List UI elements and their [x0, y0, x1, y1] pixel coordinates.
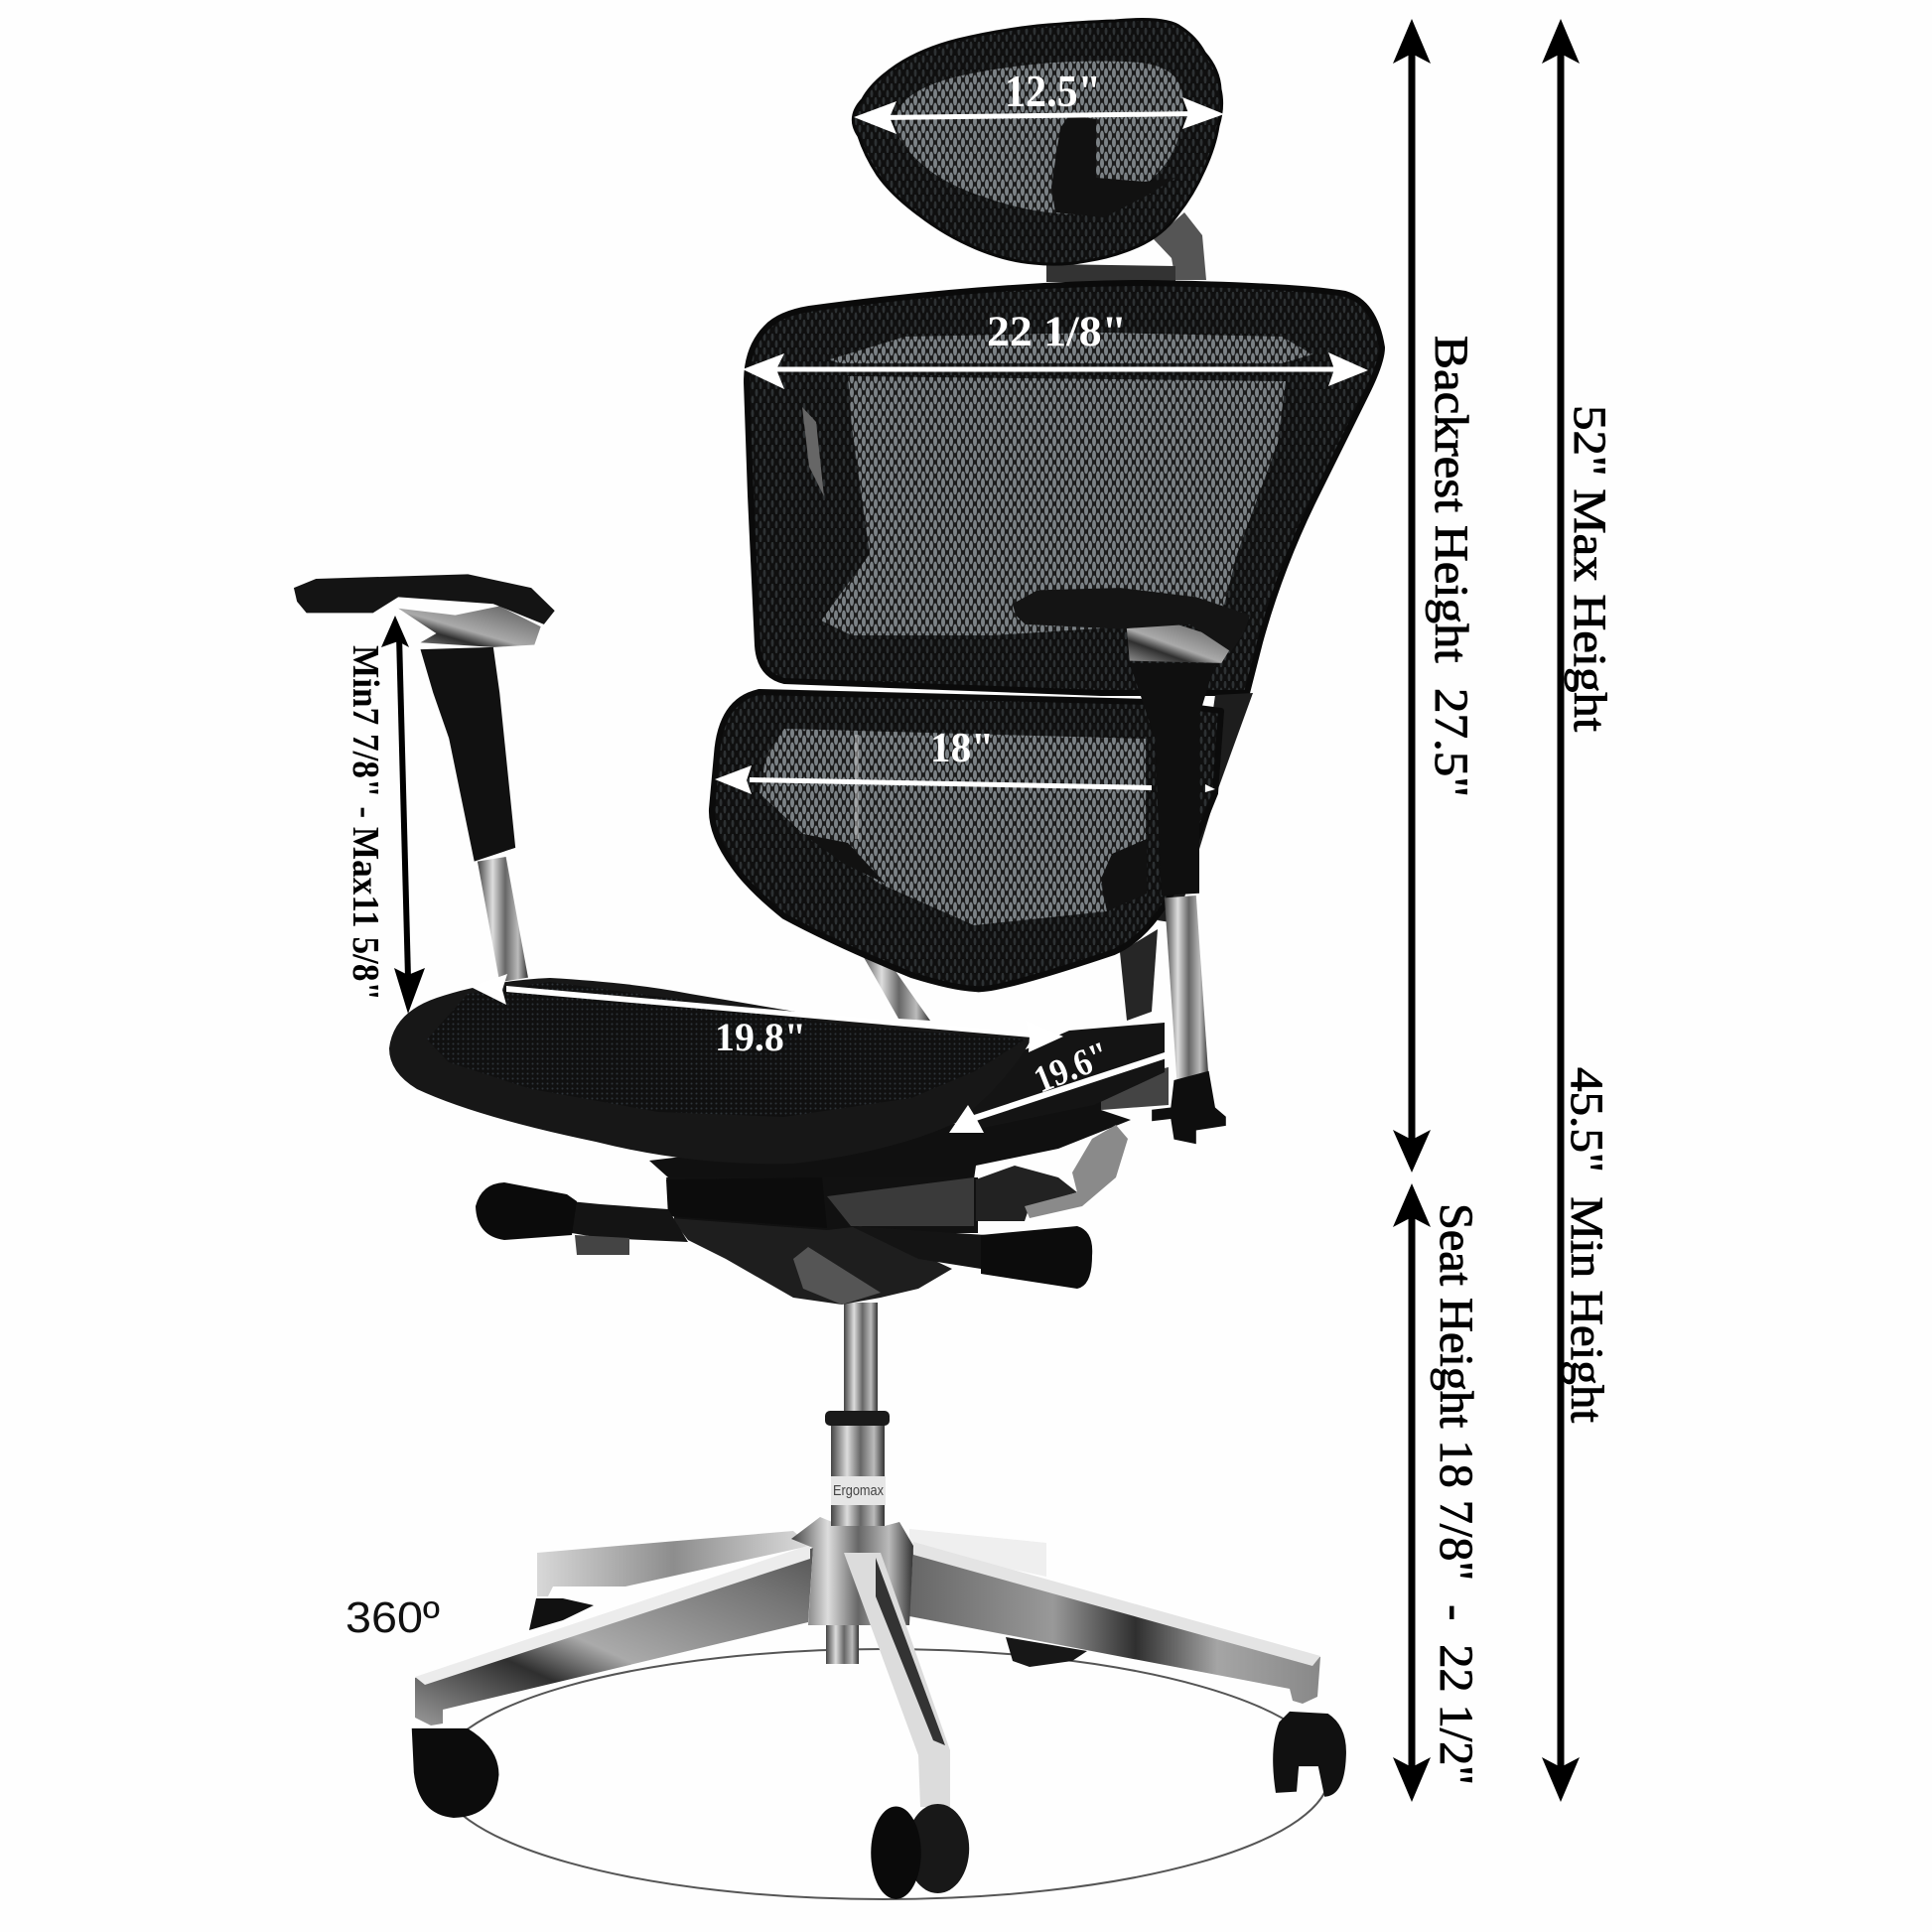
- center caster front wheel: [871, 1806, 921, 1899]
- lumbar shadow: [803, 834, 886, 884]
- rotation ring: [438, 1649, 1329, 1899]
- struts: [861, 929, 1158, 1021]
- white arrow: backrest width: 22 1/8": [987, 309, 1127, 355]
- right arm chrome: [1127, 624, 1234, 663]
- left arm pad: [294, 574, 555, 624]
- back right leg: [909, 1529, 1046, 1577]
- center hub: [791, 1517, 913, 1625]
- gas lift collar: [825, 1411, 890, 1426]
- lever clip: [575, 1235, 629, 1255]
- right arm post: [1130, 663, 1215, 896]
- chrome recline arm: [1025, 1125, 1128, 1218]
- seat underside and mechanism: [476, 1067, 1169, 1305]
- backrest light mesh: [821, 376, 1286, 635]
- column brand label: Ergomax: [833, 1482, 884, 1499]
- headrest light mesh: [895, 62, 1183, 214]
- lumbar light mesh: [759, 729, 1146, 925]
- lower post: [826, 1618, 859, 1664]
- right lever: [851, 1226, 986, 1269]
- white arrow: lumbar width: [715, 726, 1215, 794]
- white arrow: headrest width: [854, 67, 1224, 134]
- back right caster: [1006, 1637, 1087, 1667]
- underside frame: [649, 1100, 1131, 1179]
- swing plate: [976, 1166, 1077, 1221]
- lumbar reflection: [855, 735, 859, 839]
- white arrow: seat width: 19.8": [715, 1015, 806, 1059]
- lumbar side frame: [1158, 693, 1253, 923]
- mechanism backing: [666, 1177, 978, 1233]
- white arrow: seat width: [471, 974, 1063, 1059]
- back left caster: [529, 1598, 594, 1630]
- backrest height label: Backrest Height 27.5": [1425, 336, 1477, 797]
- 360 degree label: 360º: [345, 1593, 440, 1642]
- gas lift rod: [844, 1303, 878, 1412]
- lumbar shell: [712, 692, 1221, 989]
- min height label: 45.5" Min Height: [1561, 1067, 1612, 1423]
- casters: [412, 1712, 1346, 1899]
- center leg shadow: [876, 1558, 945, 1745]
- left arm chrome: [398, 607, 541, 647]
- mechanism body: [671, 1218, 952, 1305]
- headrest bracket: [1154, 212, 1206, 280]
- white arrow: seat depth: 19.6": [1029, 1034, 1116, 1101]
- backrest side mesh: [802, 407, 824, 496]
- max height label: 52" Max Height: [1564, 405, 1615, 732]
- grey bracket: [827, 1177, 974, 1226]
- seat: [389, 978, 1165, 1164]
- lumbar shadow right: [1101, 839, 1147, 911]
- seat rim: [389, 978, 1033, 1164]
- right caster: [1273, 1712, 1346, 1797]
- column brand label: [831, 1476, 886, 1505]
- arm height label: Min7 7/8" - Max11 5/8": [345, 645, 386, 1001]
- headrest: [853, 20, 1222, 282]
- left chrome strut: [861, 952, 930, 1021]
- white arrow: backrest width: [743, 309, 1368, 389]
- white arrow: headrest width: 12.5": [1005, 67, 1101, 116]
- left lever: [570, 1201, 688, 1242]
- black arrow: arm height: [381, 616, 425, 1014]
- headrest shell: [853, 20, 1222, 264]
- front left leg highlight: [415, 1545, 810, 1685]
- black arrow: backrest height: [1393, 19, 1431, 1173]
- front right leg highlight: [913, 1542, 1320, 1666]
- black arrow: overall height: [1542, 19, 1580, 1802]
- center leg: [844, 1553, 950, 1807]
- white arrow: seat depth: [949, 1034, 1167, 1133]
- backrest light top band: [830, 333, 1312, 363]
- seat right wing: [949, 1023, 1165, 1135]
- backrest: [747, 283, 1382, 693]
- white arrow: lumbar width: 18": [930, 726, 994, 771]
- left arm post: [421, 647, 515, 862]
- right lever knob: [981, 1226, 1092, 1289]
- backrest shell: [747, 283, 1382, 693]
- right side block: [1101, 1067, 1169, 1110]
- grey housing: [793, 1247, 881, 1305]
- center caster: [906, 1804, 969, 1893]
- arms: [294, 574, 1250, 1144]
- seat mesh: [427, 982, 1026, 1117]
- back left leg: [537, 1531, 810, 1596]
- left lever knob: [476, 1182, 577, 1240]
- mechanism block: [666, 1177, 827, 1228]
- right arm rod: [1165, 896, 1209, 1085]
- front right leg: [909, 1546, 1320, 1704]
- headrest mount: [1046, 264, 1175, 282]
- front left leg: [415, 1548, 813, 1725]
- seat height label: Seat Height 18 7/8" - 22 1/2": [1430, 1203, 1482, 1785]
- gas lift cylinder: [831, 1426, 885, 1526]
- headrest support shadow: [1051, 115, 1175, 217]
- lumbar support: [712, 692, 1221, 989]
- left arm rod: [478, 857, 528, 982]
- left caster: [412, 1728, 498, 1818]
- right arm pad: [1013, 588, 1250, 651]
- black arrow: seat height: [1393, 1183, 1431, 1802]
- chair base: [415, 1303, 1320, 1807]
- right strut: [1120, 929, 1158, 1021]
- right arm clamp: [1152, 1071, 1226, 1144]
